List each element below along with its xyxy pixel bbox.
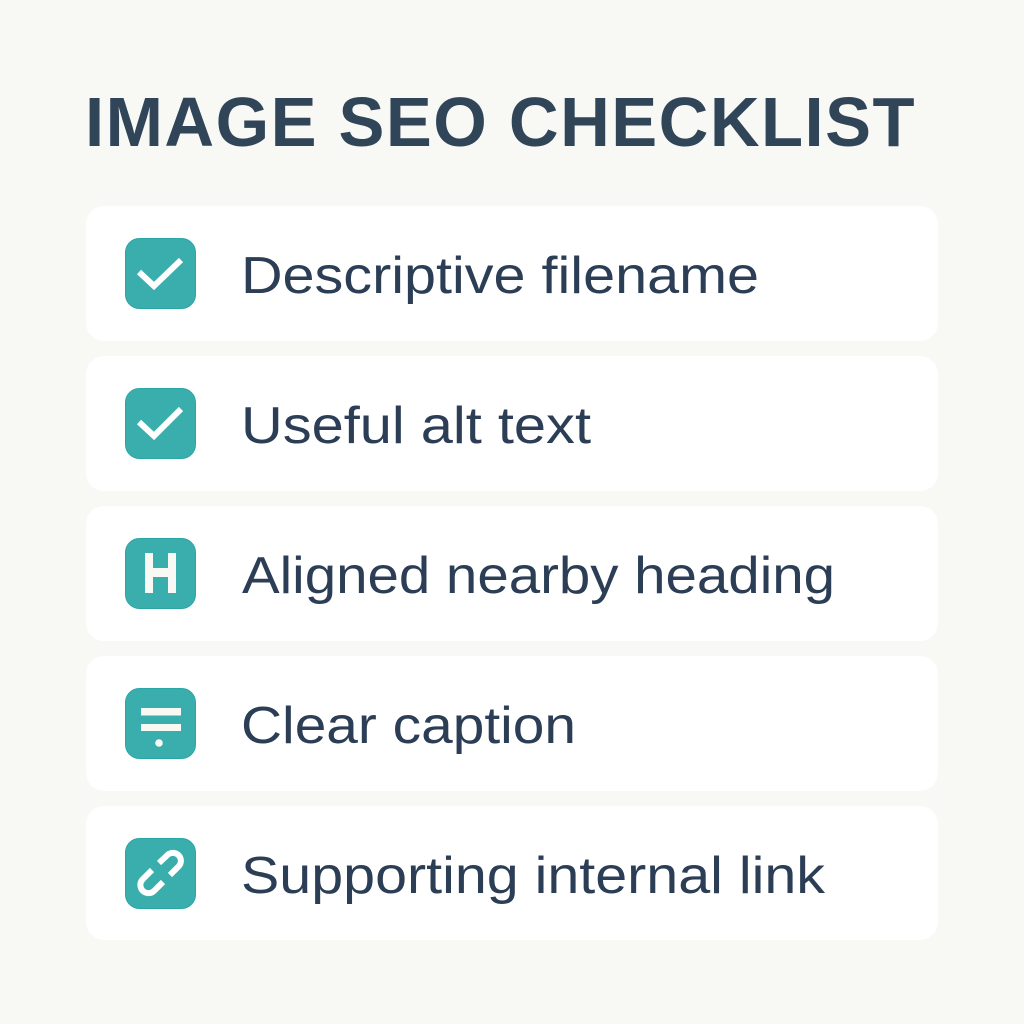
label: supporting internal link: Supporting internal link (241, 847, 826, 905)
icon: check mark (126, 388, 196, 458)
panel: supporting internal link (86, 806, 938, 940)
panel: descriptive filename (86, 206, 938, 341)
panel: clear caption (86, 656, 938, 791)
panel: aligned nearby heading (86, 506, 938, 641)
panel: useful alt text (86, 356, 938, 491)
label: descriptive filename: Descriptive filename (241, 247, 759, 305)
label: clear caption: Clear caption (241, 697, 576, 755)
icon: heading letter H (126, 538, 196, 608)
label: aligned nearby heading: Aligned nearby heading (242, 547, 835, 605)
icon: check mark (126, 238, 196, 308)
label: useful alt text: Useful alt text (241, 397, 592, 455)
icon: chain link (126, 838, 196, 908)
title: IMAGE SEO CHECKLIST (85, 83, 916, 161)
icon: caption lines (126, 688, 196, 758)
